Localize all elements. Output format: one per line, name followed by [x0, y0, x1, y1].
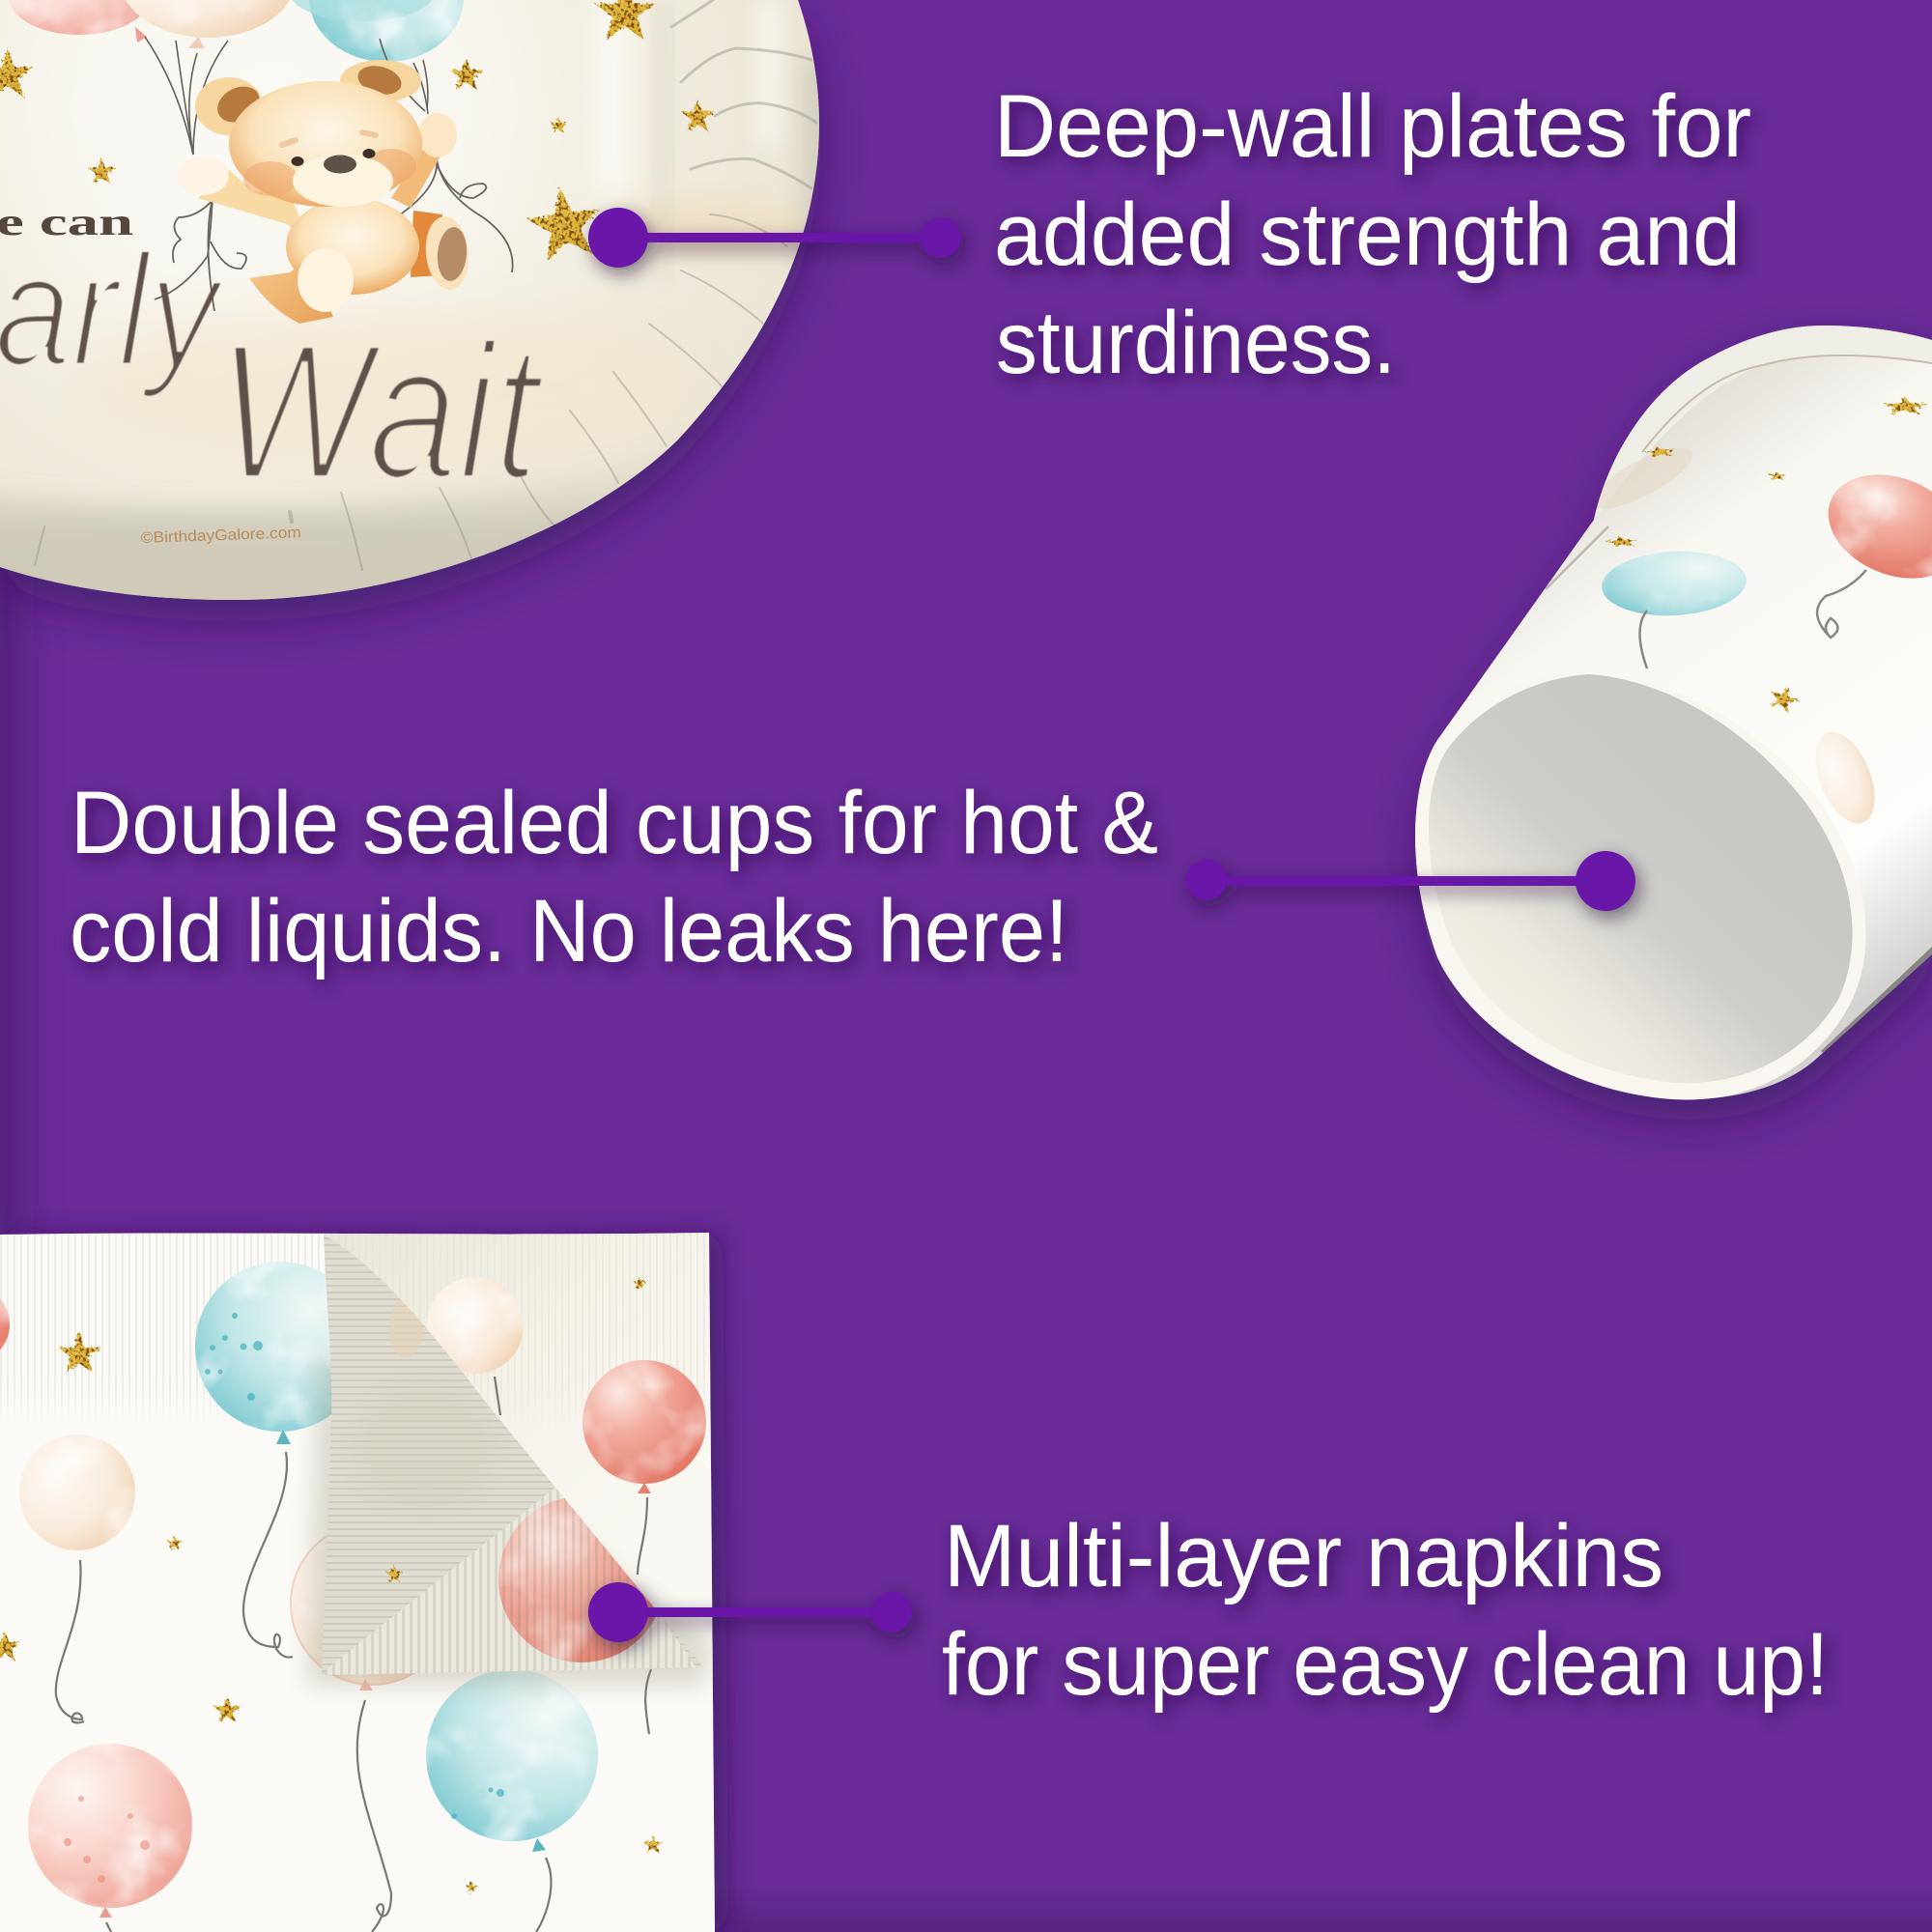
napkin body — [0, 1233, 715, 1932]
folded corner — [309, 1227, 715, 1681]
napkin balloons — [0, 1262, 706, 1918]
plate printed text: Wait — [218, 304, 545, 520]
cup inner base — [1429, 674, 1853, 1083]
plate stars — [0, 0, 714, 262]
text: plates: sturdiness. — [996, 294, 1396, 392]
plate shading and rim — [0, 0, 869, 628]
cup print — [1546, 397, 1932, 1061]
teddy bear with balloon strings — [155, 60, 513, 324]
cup body — [1415, 326, 1932, 1099]
text: napkins — [942, 1507, 1829, 1714]
text: plates: Deep-wall plates for — [994, 77, 1751, 176]
text: plates — [994, 77, 1751, 392]
callout line: napkin — [588, 1582, 912, 1642]
text: cups — [70, 774, 1158, 980]
cup lip — [1594, 326, 1932, 520]
text: napkins: Multi-layer napkins — [944, 1507, 1663, 1605]
plate printed text — [0, 200, 545, 547]
plate printed text: ©BirthdayGalore.com — [141, 525, 301, 547]
plate body — [0, 0, 819, 600]
text: plates: added strength and — [994, 185, 1741, 284]
napkin balloon strings — [56, 1377, 651, 1932]
fold shadow — [307, 1352, 710, 1686]
balloons on plate — [10, 0, 464, 155]
text: cups: cold liquids. No leaks here! — [70, 882, 1068, 980]
text: napkins: for super easy clean up! — [942, 1615, 1829, 1714]
callout line: plate — [588, 208, 961, 268]
cup underside — [1415, 669, 1866, 1099]
plate printed text: arly — [0, 221, 225, 399]
panel: paper plate photo — [0, 0, 869, 628]
napkin contents — [0, 1227, 715, 1932]
panel: napkin photo — [0, 1227, 715, 1932]
text: cups: Double sealed cups for hot & — [71, 774, 1158, 872]
panel: paper cup photo — [1415, 326, 1932, 1099]
napkin stars — [0, 1277, 663, 1893]
callout line: cup — [1186, 851, 1635, 911]
